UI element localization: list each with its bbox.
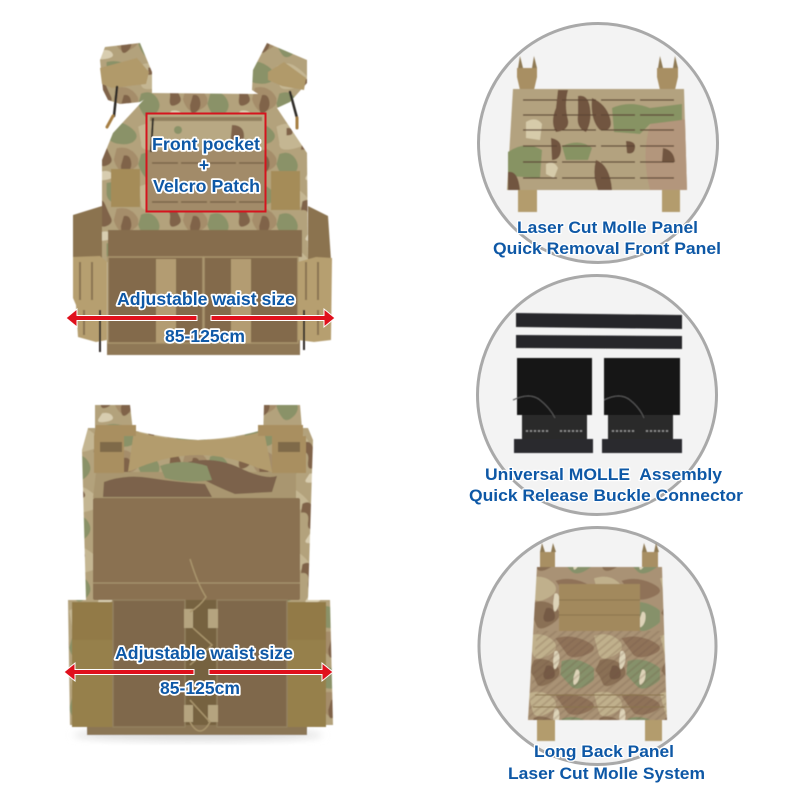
light camo xyxy=(526,119,558,178)
buckle highlights xyxy=(526,430,668,432)
bottom straps xyxy=(518,190,680,212)
left velcro patch xyxy=(111,169,140,207)
left back flap xyxy=(113,600,185,727)
back velcro panel xyxy=(93,498,300,600)
circle frame xyxy=(478,276,716,514)
left yoke buckle xyxy=(94,425,136,473)
bottom bars xyxy=(514,439,682,453)
bungee cord xyxy=(190,559,212,731)
centre gap xyxy=(185,600,217,725)
right velcro patch xyxy=(271,171,300,210)
panel: laser cut molle panel xyxy=(478,24,721,262)
lacing tabs xyxy=(184,609,218,722)
right side buckle xyxy=(298,257,332,342)
black panels xyxy=(517,358,680,415)
velcro strips xyxy=(516,313,682,349)
right back flap xyxy=(217,600,287,727)
back waist arrows xyxy=(64,663,333,681)
upper body tan base xyxy=(93,472,296,498)
lower panel xyxy=(107,340,300,355)
left side buckle xyxy=(73,256,107,342)
front pocket label: Velcro Patch xyxy=(153,176,260,196)
velcro patch xyxy=(559,584,640,631)
front pocket label: Front pocket xyxy=(152,134,260,154)
front pocket label xyxy=(152,134,260,196)
back panel photo xyxy=(528,543,667,741)
assembly photo xyxy=(513,313,682,453)
circle frame xyxy=(479,528,716,764)
right yoke buckle xyxy=(258,425,306,473)
panel caption xyxy=(469,466,744,505)
hatch overlay xyxy=(528,631,667,720)
panel caption: Laser Cut Molle Panel xyxy=(517,219,698,237)
left shoulder buckle xyxy=(100,58,149,88)
molle panel photo xyxy=(507,56,687,212)
top buckles xyxy=(540,552,658,567)
brown camo xyxy=(508,90,675,190)
left waist flap xyxy=(108,257,203,343)
right waist flap xyxy=(204,257,298,343)
panel caption: Long Back Panel xyxy=(534,743,674,761)
panel caption: Laser Cut Molle System xyxy=(508,765,705,783)
right shoulder strap xyxy=(252,43,307,108)
waist velcro band xyxy=(108,230,302,257)
panel caption: Quick Removal Front Panel xyxy=(493,240,721,258)
circle frame xyxy=(478,24,718,262)
back vest photo xyxy=(68,405,333,741)
right top strap xyxy=(263,405,303,440)
bungee loops xyxy=(513,396,644,418)
panel: molle assembly xyxy=(469,276,744,514)
ground shadow xyxy=(73,729,323,741)
left top strap xyxy=(95,405,134,440)
panel caption xyxy=(508,743,705,783)
back waist label: Adjustable waist size xyxy=(115,643,293,663)
buckle prongs xyxy=(540,543,659,552)
side camo edges xyxy=(68,600,333,725)
patch lines xyxy=(533,600,665,707)
panel stitch xyxy=(93,582,300,584)
panel body xyxy=(507,89,687,190)
bottom straps xyxy=(537,720,662,741)
back waist size: 85-125cm xyxy=(160,678,240,698)
panel body xyxy=(528,567,667,720)
buckle prongs xyxy=(518,56,678,68)
lower panel xyxy=(87,715,307,735)
front waist size: 85-125cm xyxy=(165,326,245,346)
green camo xyxy=(508,104,682,178)
front waist label: Adjustable waist size xyxy=(117,289,295,309)
left side band xyxy=(72,602,114,727)
buckle inner xyxy=(100,442,300,452)
yoke xyxy=(128,431,272,472)
front waist arrows xyxy=(66,309,335,327)
side pouches xyxy=(73,206,331,260)
pink camo xyxy=(645,116,687,190)
quick release buckles xyxy=(522,415,673,440)
panel caption: Quick Release Buckle Connector xyxy=(469,487,744,505)
cables and pull tabs xyxy=(107,87,297,128)
brown camo blobs xyxy=(103,460,277,497)
buckle details xyxy=(80,262,318,335)
green camo blob xyxy=(160,462,212,482)
front pocket label: + xyxy=(199,155,209,175)
panel caption xyxy=(493,219,721,258)
top buckles xyxy=(517,68,678,90)
right shoulder buckle xyxy=(268,62,306,90)
panel caption: Universal MOLLE Assembly xyxy=(485,466,723,484)
front vest photo xyxy=(73,43,332,355)
front pocket xyxy=(147,114,265,211)
right side band xyxy=(287,602,326,727)
laser cut slots xyxy=(523,100,675,178)
back body xyxy=(82,428,313,600)
lower cables xyxy=(100,310,304,352)
left shoulder strap xyxy=(100,43,152,104)
front pocket highlight box xyxy=(146,114,266,212)
panel: long back panel xyxy=(479,528,716,783)
flap strips xyxy=(156,259,251,343)
carrier body xyxy=(102,93,308,262)
